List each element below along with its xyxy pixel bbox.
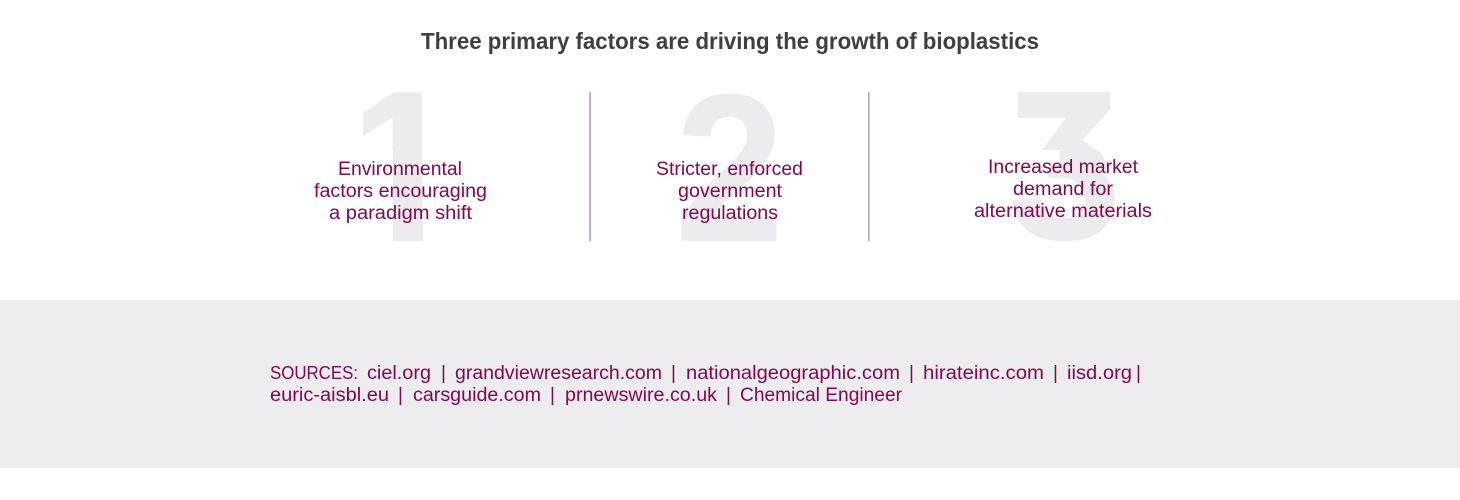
sources line 1 — [270, 362, 1141, 384]
factor 1 text: a paradigm shift — [329, 203, 473, 224]
factor 1 text: Environmental — [338, 159, 462, 180]
sources line 2: carsguide.com — [413, 385, 541, 406]
factor 2 text: Stricter, enforced — [656, 159, 803, 180]
factor 1 text — [314, 159, 487, 224]
number 2: 2 — [675, 51, 785, 286]
factor 1 text: factors encouraging — [314, 181, 487, 202]
factor 2 text: government — [678, 181, 783, 202]
sources line 1: iisd.org — [1067, 363, 1132, 384]
sources line 2: Chemical Engineer — [740, 385, 903, 406]
sources line 1: | — [1053, 363, 1058, 384]
factor 3 text — [974, 157, 1152, 222]
factor 3 text: Increased market — [988, 157, 1139, 178]
panel: factor 1 — [314, 92, 486, 241]
sources line 2: prnewswire.co.uk — [565, 385, 718, 406]
number 3 — [1012, 92, 1114, 242]
title: Three primary factors are driving the growth of bioplastics — [421, 28, 1039, 54]
sources line 2: | — [726, 385, 731, 406]
sources line 1: nationalgeographic.com — [686, 363, 900, 384]
panel: sources — [0, 300, 1460, 468]
number 1: 1 — [342, 45, 462, 287]
sources line 2: euric-aisbl.eu — [270, 385, 389, 406]
number 3: 3 — [1007, 52, 1122, 283]
factor 2 text: regulations — [682, 203, 778, 224]
sources line 2: | — [550, 385, 555, 406]
sources line 1: SOURCES: — [270, 362, 358, 383]
sources line 2 — [270, 385, 903, 406]
sources line 1: | — [909, 363, 914, 384]
factor 3 text: demand for — [1013, 179, 1114, 200]
sources line 1: hirateinc.com — [923, 363, 1044, 384]
panel: factor 2 — [656, 51, 803, 286]
panel: factor 3 — [974, 92, 1152, 242]
sources line 1: | — [671, 363, 676, 384]
factor 2 text — [656, 159, 803, 224]
sources line 1: | — [441, 363, 446, 384]
factor 3 text: alternative materials — [974, 201, 1152, 222]
sources line 1: grandviewresearch.com — [455, 363, 662, 384]
sources line 2: | — [398, 385, 403, 406]
sources line 1: ciel.org — [367, 363, 431, 384]
sources line 1: | — [1136, 363, 1141, 384]
